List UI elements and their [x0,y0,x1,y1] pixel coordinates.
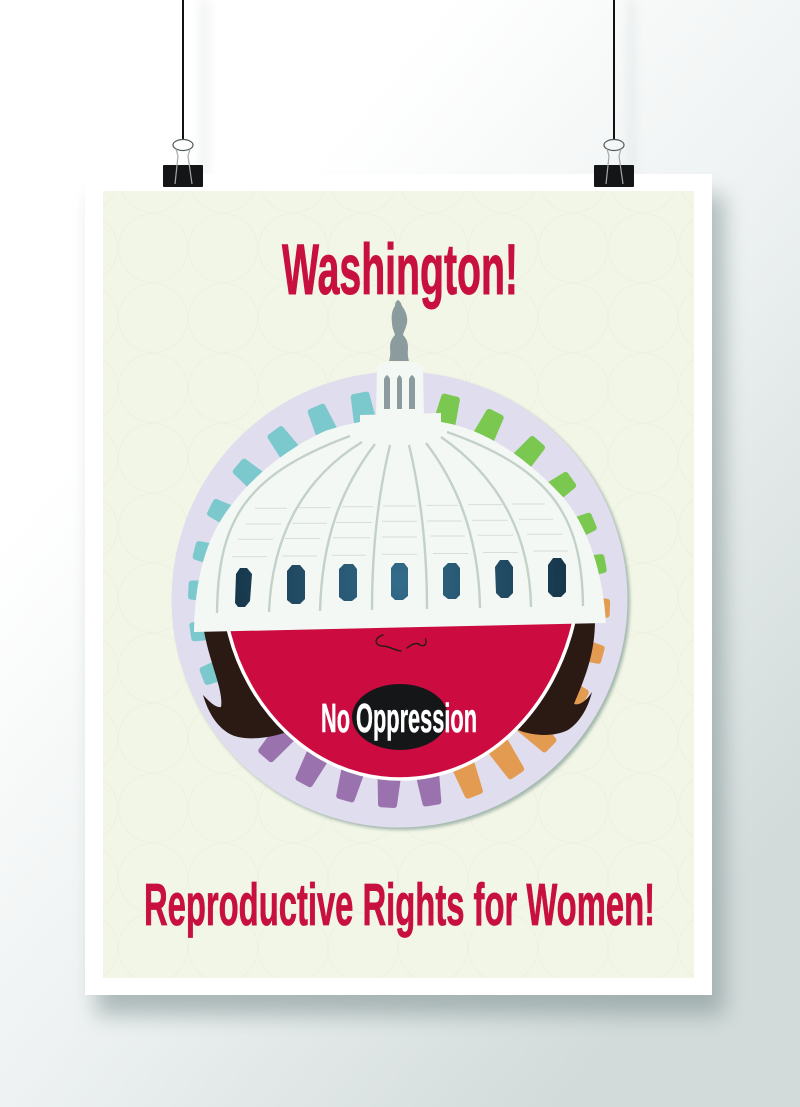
poster shadow [96,195,724,1015]
disc shadow [174,374,630,830]
statue [389,300,409,361]
dome body [194,413,606,632]
nose [376,635,426,651]
illustration: capitol dome face [172,300,630,830]
mouth [352,684,448,750]
cyan tabs [191,394,376,684]
slogan: No Oppression: No Oppression [321,695,477,741]
lavender disc [172,372,628,828]
cream artwork panel [103,191,694,978]
dome lantern [376,362,424,418]
face [228,621,574,779]
hair [203,620,595,738]
dome windows [235,558,566,607]
icon: right hanging wire and binder clip [594,0,634,187]
dome ribs [217,432,583,613]
white poster sheet [85,174,712,995]
dome ledges [232,504,568,557]
icon: left hanging wire and binder clip [163,0,203,187]
green tabs [433,396,604,579]
purple tabs [259,725,441,805]
title: Washington!: Washington! [282,231,518,310]
lantern columns [384,375,415,409]
orange tabs [453,598,607,797]
